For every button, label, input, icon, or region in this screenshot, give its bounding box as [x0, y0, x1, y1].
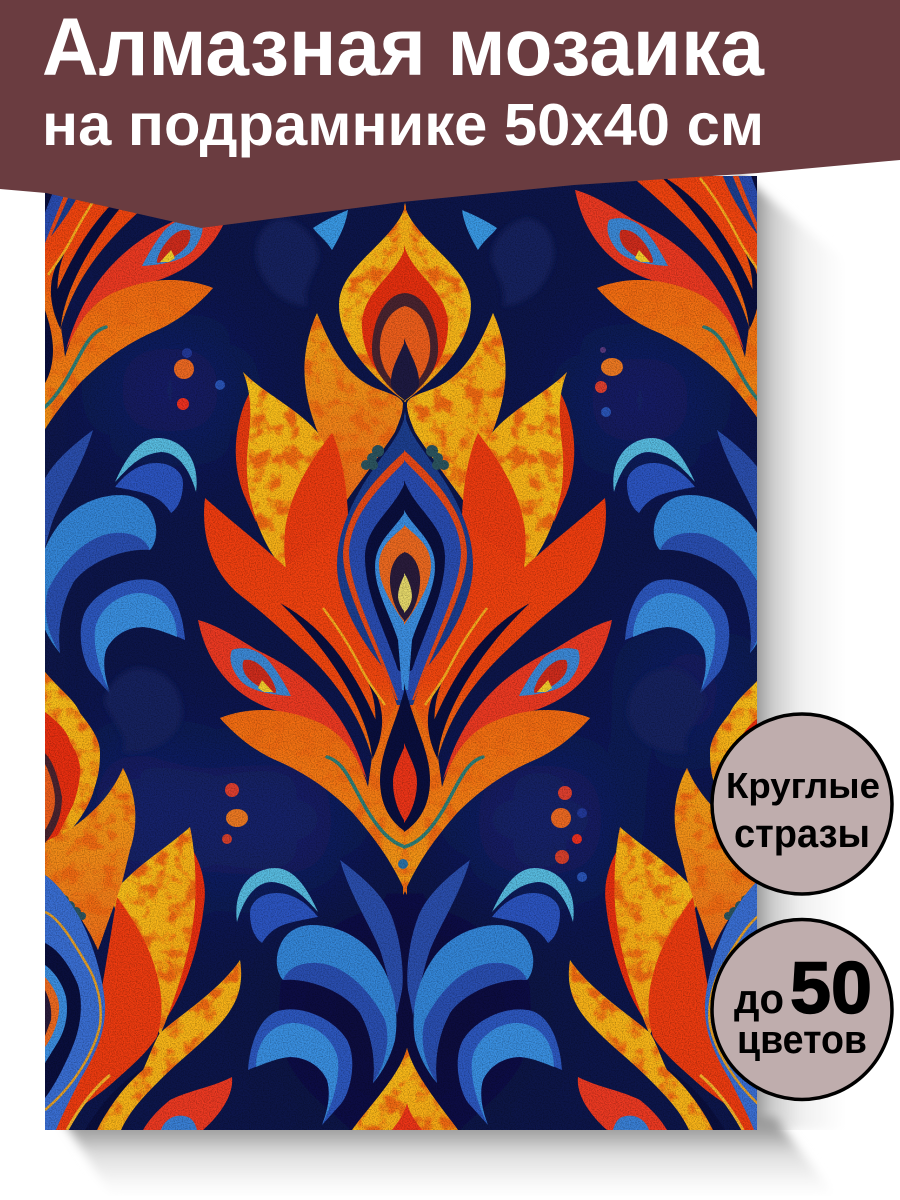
teardrop orange core — [379, 525, 406, 625]
yellow line — [67, 1075, 110, 1130]
top flame red — [362, 245, 406, 398]
teardrop yellow line — [45, 912, 101, 1110]
red feather — [198, 620, 367, 780]
flower lower left — [45, 672, 241, 1130]
plumes left — [236, 860, 403, 1125]
top flame dark drop — [391, 338, 406, 401]
upper petal — [304, 313, 403, 500]
teal bud cluster — [361, 445, 384, 470]
top flame orange core — [380, 306, 406, 392]
flower lower right — [569, 672, 765, 1130]
teardrop light blue layer — [375, 510, 406, 690]
side ornament upper left — [45, 193, 224, 694]
teardrop yellow core — [398, 573, 406, 613]
teardrop navy layer — [365, 480, 406, 675]
yellow stem line — [323, 608, 385, 705]
teardrop light blue — [45, 965, 67, 1063]
painting canvas — [45, 176, 757, 1130]
red petal — [284, 433, 352, 590]
big plume inner — [283, 963, 387, 1083]
teardrop navy — [45, 943, 81, 1098]
flame outer — [45, 672, 100, 847]
flame red — [45, 712, 80, 842]
title: Алмазная мозаика — [42, 2, 765, 93]
badge: round rhinestones: стразы — [734, 812, 870, 856]
light blue drop — [313, 210, 348, 250]
red behind far petal — [236, 392, 266, 522]
lower orange leaf — [220, 700, 407, 895]
feather eye — [161, 1116, 197, 1130]
dark slit — [280, 603, 379, 760]
teal buds — [59, 895, 86, 920]
scattered dots — [174, 347, 623, 882]
teardrop dark core — [390, 552, 406, 622]
second slit — [367, 680, 382, 760]
crescent — [236, 868, 318, 922]
upper right plumes — [613, 430, 757, 694]
dark slit — [85, 1067, 145, 1130]
flame dark arch — [45, 753, 62, 843]
bottom centre flame — [352, 1048, 458, 1130]
badge: round rhinestones — [712, 714, 892, 894]
central teardrop outer — [337, 412, 406, 705]
dark blob lower right — [628, 668, 706, 753]
background washes — [75, 312, 757, 1124]
central ornament — [174, 203, 623, 1125]
top flame dark arch — [372, 293, 406, 400]
narrow leaf — [340, 860, 403, 1015]
low plume — [248, 1009, 352, 1125]
round plume — [250, 893, 318, 943]
badge: up to 50 colours — [712, 920, 892, 1100]
far petal — [112, 827, 195, 1035]
small blue bud — [402, 859, 412, 869]
upper right feathers — [575, 176, 757, 418]
red behind far petal — [160, 845, 205, 1016]
canvas drop shadow — [62, 170, 845, 1196]
canvas grain — [45, 176, 757, 1130]
teardrop orange — [45, 977, 59, 1047]
big red petal — [52, 897, 162, 1130]
left upper ornament — [236, 203, 406, 570]
right upper ornament — [404, 203, 574, 570]
upper left plumes — [30, 430, 197, 695]
right lower ornament — [398, 412, 612, 895]
feather eye — [230, 648, 291, 696]
dark blue blob — [256, 218, 319, 306]
left lower ornament — [198, 412, 412, 895]
badge: up to 50 colours: до — [734, 975, 784, 1022]
central lower dark drop — [380, 683, 406, 832]
dark blob lower left — [104, 668, 182, 753]
upper petal — [45, 768, 135, 950]
subtitle: на подрамнике 50х40 см — [42, 92, 764, 158]
header banner — [0, 0, 900, 228]
upper left feathers — [45, 193, 224, 430]
badge: up to 50 colours: цветов — [737, 1018, 867, 1062]
navy background — [45, 290, 87, 1130]
lower leaf — [97, 960, 241, 1130]
plumes right — [407, 860, 574, 1125]
top flame outer — [339, 203, 406, 402]
big plume — [277, 925, 396, 1083]
low plume inner — [256, 1023, 338, 1125]
lower red feather — [143, 1077, 232, 1130]
teardrop outer blue — [45, 875, 105, 1130]
teardrop blue layer — [349, 460, 406, 700]
big red petal mass — [204, 498, 402, 757]
far petal — [243, 372, 345, 570]
badge: round rhinestones: Круглые — [726, 765, 880, 806]
flame orange core — [45, 764, 55, 830]
teardrop dark core — [45, 990, 51, 1036]
teal tendril — [327, 757, 406, 847]
side ornament upper right — [575, 176, 757, 694]
yellow right upper petal — [407, 313, 506, 500]
teardrop red stripe — [343, 450, 406, 700]
central lower red drop — [393, 743, 406, 823]
badge: up to 50 colours: 50 — [790, 948, 872, 1029]
